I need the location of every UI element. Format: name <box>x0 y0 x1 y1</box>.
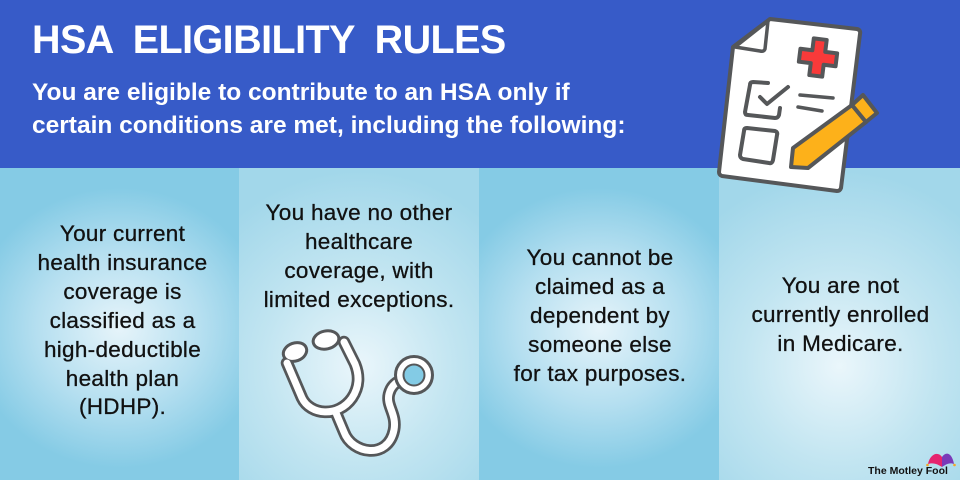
text: HDHP condition: health insurance <box>38 250 207 275</box>
text: dependent condition <box>514 245 686 386</box>
subtitle: certain conditions are met, including the following: <box>32 112 625 139</box>
red cross <box>797 37 839 78</box>
text: dependent condition: claimed as a <box>535 274 665 299</box>
text: no other coverage condition: You have no other <box>266 200 452 225</box>
checkbox with tick <box>745 82 780 118</box>
panel: not a dependent <box>479 168 719 480</box>
text: HDHP condition: (HDHP). <box>79 394 166 419</box>
panel: HDHP coverage <box>0 168 239 480</box>
panel: not in Medicare <box>719 168 960 480</box>
logo wordmark: The Motley Fool <box>868 465 948 477</box>
text: no other coverage condition: limited exceptions. <box>264 287 454 312</box>
empty checkbox <box>740 128 777 163</box>
text: dependent condition: You cannot be <box>527 245 673 270</box>
text: Medicare condition: You are not <box>782 273 899 298</box>
text: HDHP condition: coverage is <box>63 279 182 304</box>
panel: no other coverage <box>239 168 479 480</box>
text: Medicare condition: in Medicare. <box>777 331 904 356</box>
text: HDHP condition: high-deductible <box>44 337 201 362</box>
icon: jester hat <box>926 454 956 467</box>
text: HDHP condition: classified as a <box>50 308 195 333</box>
header band <box>0 0 960 168</box>
text: no other coverage condition <box>264 200 454 312</box>
form sheet <box>719 19 860 191</box>
text: HDHP condition <box>38 221 207 419</box>
subtitle <box>32 79 625 139</box>
icon: medical form with pencil <box>717 17 880 193</box>
text: no other coverage condition: healthcare <box>305 229 413 254</box>
text: Medicare condition: currently enrolled <box>752 302 929 327</box>
text: dependent condition: someone else <box>528 332 672 357</box>
text: no other coverage condition: coverage, with <box>284 258 434 283</box>
text: HDHP condition: health plan <box>66 366 179 391</box>
icon: stethoscope <box>280 329 434 457</box>
text: Medicare condition <box>752 273 929 356</box>
text: HDHP condition: Your current <box>60 221 185 246</box>
title: HSA ELIGIBILITY RULES <box>32 18 506 62</box>
text lines <box>798 95 833 111</box>
pencil <box>791 105 866 168</box>
folded corner <box>735 21 768 51</box>
logo: The Motley Fool <box>868 454 956 477</box>
subtitle: You are eligible to contribute to an HSA only if <box>32 79 570 106</box>
text: dependent condition: for tax purposes. <box>514 361 686 386</box>
text: dependent condition: dependent by <box>530 303 670 328</box>
